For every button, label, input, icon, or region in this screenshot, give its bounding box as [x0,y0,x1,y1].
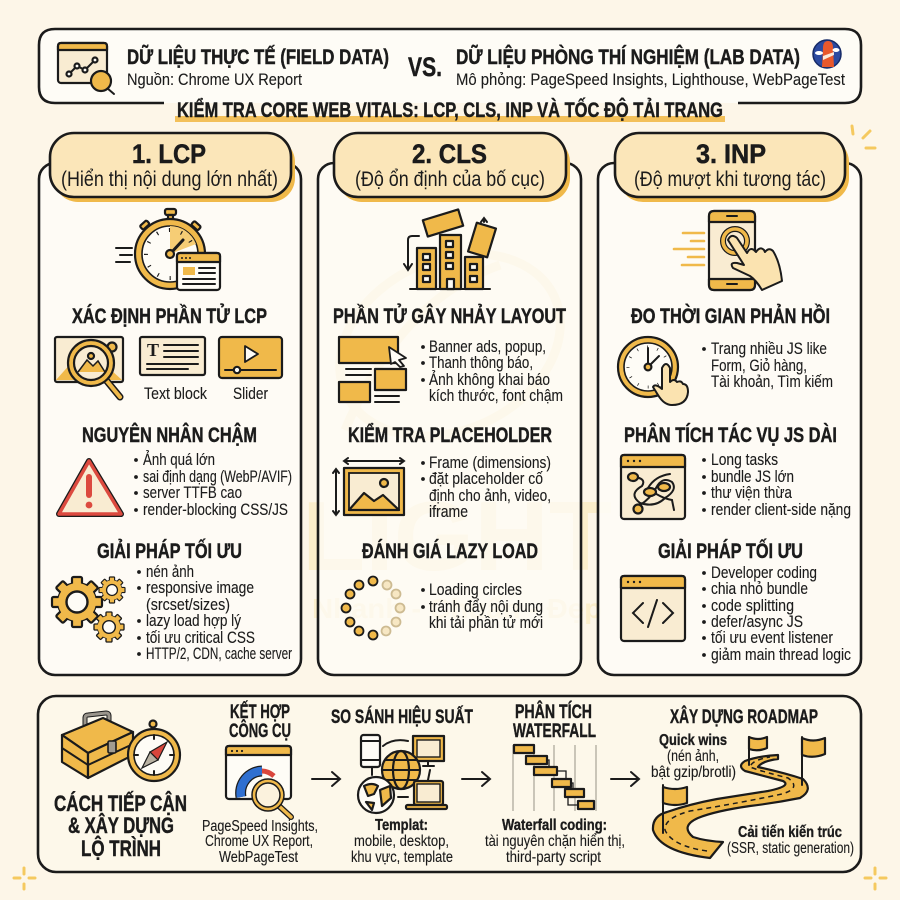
icon: placeholder frame [333,458,404,515]
INP fixes list: defer/async JS [711,613,803,631]
icon: image search [55,337,123,397]
heading: identify LCP element: XÁC ĐỊNH PHẦN TỬ LCP [72,304,267,328]
step: waterfall analysis: third-party script [506,849,602,866]
lazy load list [421,581,543,632]
step: build roadmap: Cải tiến kiến trúc [738,824,842,841]
step: compare performance: khu vực, template [351,849,453,866]
icon: shifting buildings [404,209,496,289]
LCP fixes list: tối ưu critical CSS [146,629,255,647]
step: combine tools [202,701,318,866]
icon: devices and globes [358,735,447,813]
field data heading: DỮ LIỆU THỰC TẾ (FIELD DATA) [127,45,389,69]
layout shift list [421,338,563,405]
step: waterfall analysis [485,701,625,866]
LCP header pill: (Hiển thị nội dung lớn nhất) [61,168,278,191]
LCP fixes list: (srcset/sizes) [146,596,230,614]
heading: LCP fixes: GIẢI PHÁP TỐI ƯU [97,539,242,563]
panel: INP [598,133,861,675]
step: build roadmap: bật gzip/brotli) [651,764,736,781]
response time list: Tài khoản, Tìm kiếm [711,373,833,391]
layout shift list: Thanh thông báo, [429,354,533,372]
INP header pill: (Độ mượt khi tương tác) [634,168,826,191]
layout shift list: kích thước, font chậm [429,387,563,405]
decorative sparkle: top right [852,126,875,148]
icon: gears [52,577,125,642]
arrow: tools to compare [312,772,340,786]
heading: approach and roadmap [54,791,187,861]
watermark brand: LIGHT [302,481,612,591]
panel: LCP [39,133,301,675]
heading: approach and roadmap: CÁCH TIẾP CẬN [54,791,187,816]
text block label: Text block [144,385,208,403]
placeholder list: đặt placeholder cố [429,470,543,488]
placeholder list: iframe [429,503,468,521]
long tasks list [702,451,851,519]
heading: measure response time: ĐO THỜI GIAN PHẢN HỒI [631,304,830,328]
layout shift list: Banner ads, popup, [429,338,546,356]
field data source: Nguồn: Chrome UX Report [127,70,302,89]
placeholder list [421,454,551,521]
decorative sparkle: bottom left [14,868,35,889]
LCP fixes list: HTTP/2, CDN, cache server [146,645,292,663]
LCP fixes list: lazy load hợp lý [146,612,242,630]
heading: long JS tasks: PHÂN TÍCH TÁC VỤ JS DÀI [624,423,837,447]
lab data heading: DỮ LIỆU PHÒNG THÍ NGHIỆM (LAB DATA) [456,45,800,69]
icon: winding road with flags [653,737,825,858]
step: build roadmap: (nén ảnh, [667,748,719,765]
icon: text block [140,337,205,375]
icon: gauge and magnifier [226,746,291,817]
icon: phone touch [674,211,782,290]
arrow: waterfall to roadmap [611,772,639,786]
step: waterfall analysis: PHÂN TÍCH [515,701,592,723]
heading: lazy load review: ĐÁNH GIÁ LAZY LOAD [362,540,538,563]
heading: slow causes: NGUYÊN NHÂN CHẬM [82,423,257,447]
placeholder list: định cho ảnh, video, [429,487,551,505]
step: combine tools: KẾT HỢP [230,701,290,723]
slider label: Slider [233,385,268,403]
CLS header pill: 2. CLS [412,139,487,169]
INP fixes list: tối ưu event listener [711,629,833,647]
INP fixes list [702,564,851,664]
response time list [702,340,833,391]
step: compare performance: mobile, desktop, [354,833,449,850]
main title: KIỂM TRA CORE WEB VITALS: LCP, CLS, INP VÀ TỐC ĐỘ TẢI TRANG [177,96,723,122]
heading: approach and roadmap: & XÂY DỰNG [68,813,174,838]
placeholder list: Frame (dimensions) [429,454,551,472]
heading: INP fixes: GIẢI PHÁP TỐI ƯU [658,539,803,563]
icon: field data chart [58,43,114,94]
LCP fixes list [137,563,292,663]
panel: approach and roadmap [38,696,861,872]
lazy load list: Loading circles [429,581,522,599]
step: combine tools: PageSpeed Insights, [202,818,318,835]
panel: field vs lab data [39,29,861,103]
icon: toolbox and compass [62,713,180,781]
versus label: VS. [408,52,442,82]
causes list [134,450,292,519]
watermark brand: Nhanh - Chuẩn - Đẹp [312,593,602,624]
icon: layout with cursor [339,337,406,402]
causes list: render-blocking CSS/JS [143,501,288,519]
heading: layout shift elements: PHẦN TỬ GÂY NHẢY LAYOUT [333,304,566,328]
icon: clock with hand [618,337,688,405]
long tasks list: Long tasks [711,451,778,469]
INP header pill: 3. INP [696,139,766,169]
step: waterfall analysis: tài nguyên chặn hiển thị, [485,833,625,850]
icon: loading circles [342,576,404,640]
INP fixes list: Developer coding [711,564,817,582]
LCP header pill [50,133,295,202]
icon: tangled scripts window [621,455,685,519]
step: build roadmap [651,706,854,858]
watermark logo [310,219,590,471]
step: build roadmap: (SSR, static generation) [727,840,854,857]
response time list: Form, Giỏ hàng, [711,357,807,375]
LCP fixes list: responsive image [146,579,254,597]
step: compare performance [331,706,473,866]
LCP header pill: 1. LCP [132,139,206,169]
lazy load list: khi tải phần tử mới [429,614,543,632]
INP fixes list: chia nhỏ bundle [711,580,808,598]
arrow: compare to waterfall [462,772,490,786]
step: combine tools: CÔNG CỤ [229,720,291,742]
icon: slider [219,337,282,378]
INP fixes list: giảm main thread logic [711,646,851,664]
lazy load list: tránh đẩy nội dung [429,598,543,616]
icon: warning triangle [59,461,121,514]
step: waterfall analysis: Waterfall coding: [502,817,607,834]
INP header pill [615,133,849,202]
CLS header pill: (Độ ổn định của bố cục) [355,168,545,191]
step: build roadmap: XÂY DỰNG ROADMAP [670,706,818,728]
step: compare performance: SO SÁNH HIỆU SUẤT [331,706,473,728]
long tasks list: thư viện thừa [711,484,793,502]
CLS header pill [334,133,570,202]
panel: CLS [318,133,581,675]
response time list: Trang nhiều JS like [711,340,827,358]
INP fixes list: code splitting [711,597,794,615]
step: waterfall analysis: WATERFALL [513,721,596,742]
step: build roadmap: Quick wins [659,732,727,749]
icon: code window [621,576,685,641]
icon: lighthouse logo [813,40,841,68]
step: combine tools: WebPageTest [219,849,299,866]
heading: check placeholder: KIỂM TRA PLACEHOLDER [348,424,552,447]
step: compare performance: Templat: [375,817,428,834]
decorative sparkle: bottom right [865,868,886,889]
icon: waterfall chart [513,745,596,811]
step: combine tools: Chrome UX Report, [205,833,313,850]
lab data tools: Mô phỏng: PageSpeed Insights, Lighthouse, WebPageTest [456,70,845,89]
causes list: Ảnh quá lớn [143,450,215,469]
causes list: server TTFB cao [143,484,242,502]
icon: stopwatch with page [116,209,220,290]
icon: text block: T [147,340,159,360]
long tasks list: render client-side nặng [711,501,851,519]
heading: approach and roadmap: LỘ TRÌNH [81,836,161,861]
LCP fixes list: nén ảnh [146,563,194,581]
long tasks list: bundle JS lớn [711,468,794,486]
causes list: sai định dạng (WebP/AVIF) [143,468,292,486]
layout shift list: Ảnh không khai báo [429,370,550,389]
